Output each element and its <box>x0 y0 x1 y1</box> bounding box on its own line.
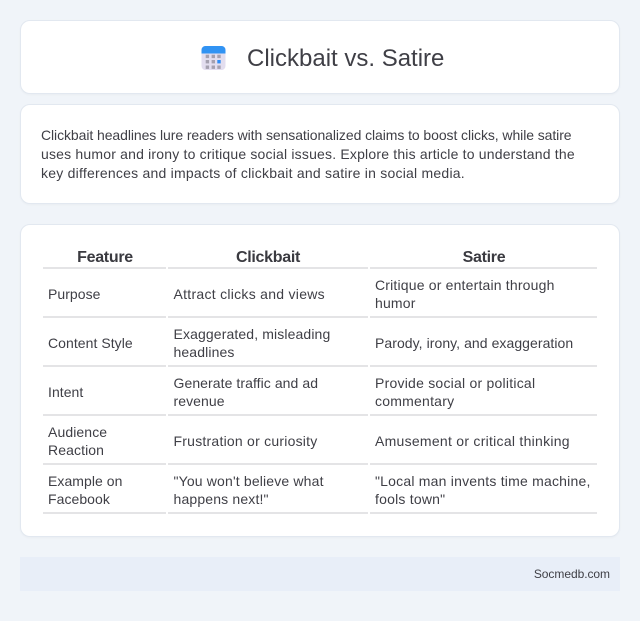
row: Content Style: Exaggerated, misleading <box>174 326 330 342</box>
table heading: Clickbait: Clickbait <box>236 249 300 266</box>
icon: calendar <box>202 46 226 70</box>
row: Content Style: headlines <box>174 344 235 360</box>
row: Intent: Provide social or political <box>375 375 535 391</box>
row: Example on Facebook: "You won't believe what <box>174 473 324 489</box>
row: Example on Facebook: fools town" <box>375 491 445 507</box>
row: Example on Facebook: "Local man invents time machine, <box>375 473 591 489</box>
row: Audience Reaction: Amusement or critical thinking <box>375 433 570 449</box>
row: Audience Reaction <box>48 424 570 458</box>
footer bar <box>20 557 620 591</box>
row: Intent: revenue <box>174 393 225 409</box>
row: Example on Facebook <box>48 473 591 507</box>
row: Content Style: Content Style <box>48 335 133 351</box>
row: Purpose: humor <box>375 295 416 311</box>
panel: comparison table <box>20 224 620 537</box>
row: Purpose <box>48 277 555 311</box>
row: Audience Reaction: Reaction <box>48 442 104 458</box>
row: Content Style <box>48 326 573 360</box>
row: Intent <box>48 375 535 409</box>
row: Audience Reaction: Frustration or curiosity <box>174 433 318 449</box>
row: Intent: commentary <box>375 393 454 409</box>
text block: introduction <box>41 127 575 181</box>
row: Audience Reaction: Audience <box>48 424 107 440</box>
row: Purpose: Critique or entertain through <box>375 277 555 293</box>
text block: introduction: Clickbait headlines lure readers with sensationalized claims to boost clicks, while satire <box>41 127 572 143</box>
footer text: Socmedb.com <box>534 567 610 581</box>
row: Example on Facebook: happens next!" <box>174 491 269 507</box>
title: Clickbait vs. Satire <box>247 45 444 72</box>
panel: introduction <box>20 104 620 204</box>
row: Intent: Intent <box>48 384 83 400</box>
row: Content Style: Parody, irony, and exaggeration <box>375 335 573 351</box>
table heading: Satire: Satire <box>463 249 505 266</box>
row: Purpose: Purpose <box>48 286 100 302</box>
text block: introduction: uses humor and irony to critique social issues. Explore this article to understand the <box>41 146 575 162</box>
panel: title card <box>20 20 620 94</box>
text block: introduction: key differences and impacts of clickbait and satire in social media. <box>41 165 465 181</box>
table heading: Feature: Feature <box>77 249 133 266</box>
row: Intent: Generate traffic and ad <box>174 375 318 391</box>
row: Purpose: Attract clicks and views <box>174 286 325 302</box>
row: Example on Facebook: Facebook <box>48 491 110 507</box>
row: Example on Facebook: Example on <box>48 473 122 489</box>
